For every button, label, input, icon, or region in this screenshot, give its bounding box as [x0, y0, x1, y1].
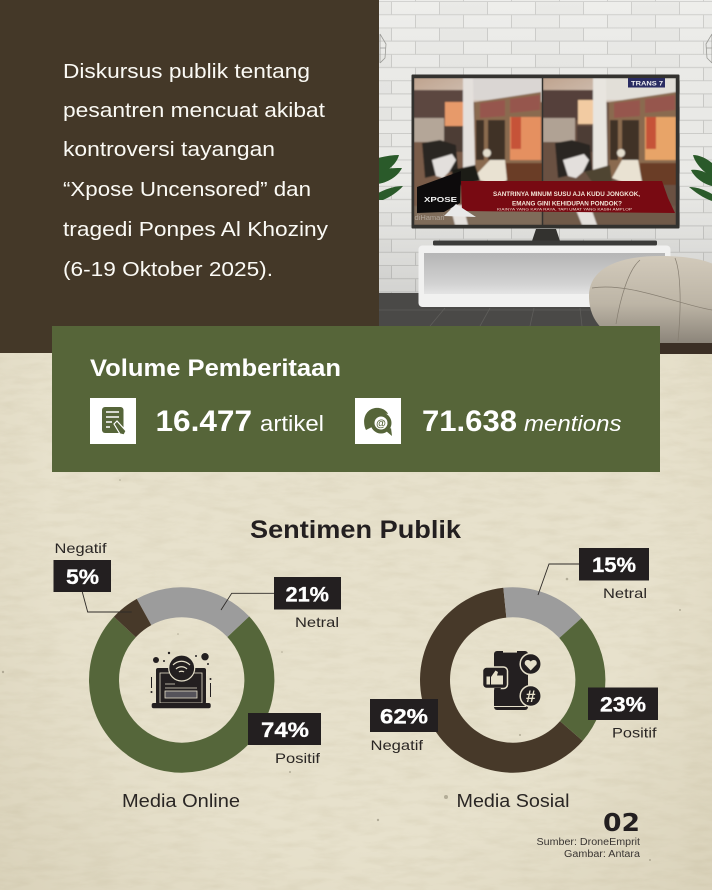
- stat: mentions: 71.638: [422, 405, 517, 438]
- channel logo: TRANS 7: [631, 80, 663, 88]
- icon: hanging lamps: [380, 34, 712, 63]
- source note: Gambar: Antara: [564, 849, 640, 860]
- television: [412, 74, 680, 228]
- intro text: “Xpose Uncensored” dan: [63, 179, 311, 201]
- pouf: [589, 256, 712, 343]
- label: media sosial positif: [588, 688, 658, 740]
- show logo: XPOSE: [424, 195, 457, 204]
- label: media online netral: 21%: [286, 584, 329, 606]
- screen: right video frame: [543, 78, 676, 225]
- heading: sentimen publik: Sentimen Publik: [250, 516, 461, 544]
- banner headline: EMANG GINI KEHIDUPAN PONDOK?: [512, 200, 622, 208]
- stat: mentions: mentions: [524, 411, 622, 436]
- TV cabinet: [418, 246, 670, 307]
- banner headline: SANTRINYA MINUM SUSU AJA KUDU JONGKOK,: [493, 191, 640, 198]
- banner headline: KIAINYA YANG KAYA RAYA, TAPI UMAT YANG KASIH AMPLOP: [497, 208, 633, 212]
- channel logo: [628, 78, 665, 88]
- donut chart: media sosial: [420, 587, 605, 773]
- caption: media online: Media Online: [122, 791, 240, 811]
- donut chart: media online: [89, 587, 274, 773]
- stat: mentions: [422, 405, 622, 438]
- label: media online negatif: 5%: [66, 566, 99, 589]
- label: media sosial negatif: [370, 699, 438, 753]
- stat: articles: [156, 405, 324, 438]
- icon: phone with social badges: [482, 651, 541, 710]
- stat: articles: 16.477: [156, 405, 252, 438]
- icon: phone with social badges: #: [526, 687, 536, 706]
- show logo: diHamari: [414, 213, 445, 222]
- label: media sosial negatif: Negatif: [370, 737, 423, 753]
- floor: [379, 293, 712, 354]
- source note: Sumber: DroneEmprit: [536, 837, 640, 848]
- TV stand: [433, 229, 657, 246]
- caption: media sosial: Media Sosial: [456, 791, 570, 811]
- icon: document: [90, 398, 136, 444]
- panel: volume pemberitaan: [52, 326, 660, 472]
- icon: laptop with wifi: [150, 652, 212, 708]
- label: media sosial positif: 23%: [600, 694, 646, 716]
- banner headline: [493, 191, 640, 212]
- label: media online positif: [248, 713, 321, 766]
- label: media sosial netral: [538, 548, 649, 601]
- label: media online netral: [221, 577, 341, 630]
- label: media online positif: Positif: [275, 750, 320, 766]
- source note: [536, 837, 640, 860]
- label: media online positif: 74%: [261, 719, 309, 742]
- page number: 02: [603, 808, 640, 837]
- label: media online negatif: [54, 540, 132, 612]
- label: media online negatif: Negatif: [54, 540, 107, 556]
- intro text: tragedi Ponpes Al Khoziny: [63, 219, 329, 241]
- intro text: Diskursus publik tentang: [63, 61, 310, 83]
- label: media sosial positif: Positif: [612, 724, 657, 740]
- news banner: [461, 181, 675, 213]
- screen: left video frame: [414, 78, 542, 225]
- intro text: pesantren mencuat akibat: [63, 100, 325, 122]
- intro text: kontroversi tayangan: [63, 139, 275, 161]
- show logo: [414, 171, 476, 222]
- heading: volume: Volume Pemberitaan: [90, 355, 341, 382]
- plants: [378, 155, 712, 201]
- stat: articles: artikel: [260, 411, 324, 436]
- photo: TV on a brick wall: [378, 0, 712, 354]
- icon: mentions: [355, 398, 401, 444]
- label: media online netral: Netral: [295, 614, 339, 630]
- label: media sosial negatif: 62%: [380, 706, 428, 728]
- brown text panel: [0, 0, 379, 353]
- intro text: [63, 61, 329, 281]
- intro text: (6-19 Oktober 2025).: [63, 259, 273, 281]
- icon: mentions: @: [376, 418, 386, 430]
- label: media sosial netral: 15%: [592, 554, 636, 577]
- label: media sosial netral: Netral: [603, 585, 647, 601]
